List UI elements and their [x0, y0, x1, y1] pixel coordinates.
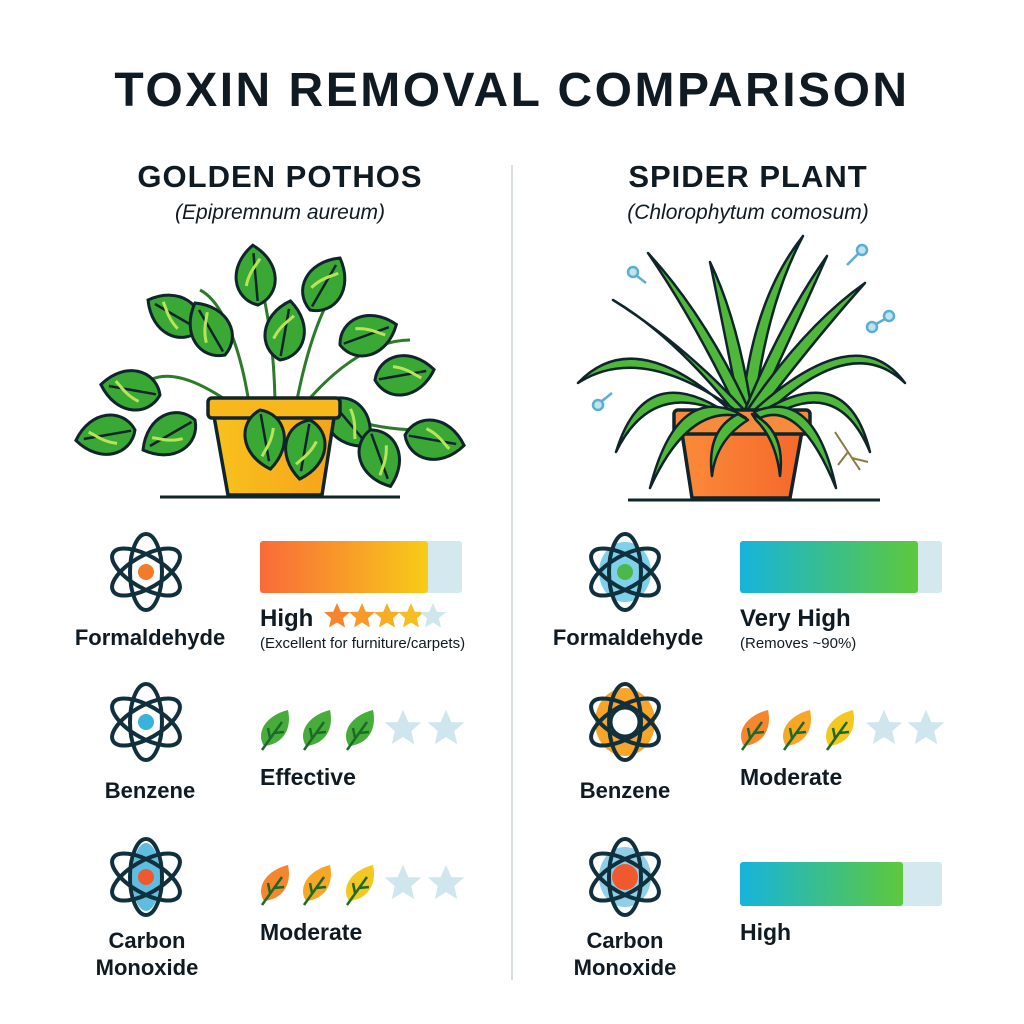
leaf rating — [261, 710, 464, 750]
row: benzene right: Moderate — [740, 764, 842, 790]
row: benzene right — [580, 684, 944, 803]
heading: golden pothos: (Epipremnum aureum) — [175, 201, 385, 224]
bar: high — [260, 541, 462, 593]
row: carbon monoxide left: Moderate — [260, 919, 362, 945]
title: TOXIN REMOVAL COMPARISON — [114, 64, 910, 117]
heading: spider plant — [627, 159, 869, 224]
illustration: golden pothos — [73, 244, 467, 497]
row: formaldehyde left: High — [260, 605, 313, 632]
row: benzene left — [105, 684, 464, 803]
row: formaldehyde left: (Excellent for furniture/carpets) — [260, 635, 465, 652]
row: carbon monoxide left: Carbon — [108, 928, 186, 953]
row: carbon monoxide right: Carbon — [586, 928, 664, 953]
heading: golden pothos: GOLDEN POTHOS — [137, 159, 423, 194]
row: carbon monoxide right — [574, 839, 942, 980]
row: benzene right: Benzene — [580, 778, 670, 803]
row: formaldehyde right — [553, 534, 942, 652]
row: carbon monoxide right: High — [740, 919, 791, 945]
icon: atom orange — [105, 534, 187, 610]
row: benzene left: Benzene — [105, 778, 195, 803]
heading: golden pothos — [137, 159, 423, 224]
row: carbon monoxide left — [96, 839, 464, 980]
heading: spider plant: SPIDER PLANT — [628, 159, 868, 194]
row: formaldehyde left — [75, 534, 465, 652]
row: formaldehyde right: Very High — [740, 605, 851, 632]
row: formaldehyde right: (Removes ~90%) — [740, 635, 856, 652]
heading: spider plant: (Chlorophytum comosum) — [627, 201, 869, 224]
stars — [324, 603, 446, 628]
row: carbon monoxide left: Monoxide — [96, 955, 198, 980]
row: formaldehyde right: Formaldehyde — [553, 625, 703, 650]
row: formaldehyde left: Formaldehyde — [75, 625, 225, 650]
row: benzene left: Effective — [260, 764, 356, 790]
row: carbon monoxide right: Monoxide — [574, 955, 676, 980]
illustration: spider plant — [578, 236, 905, 500]
